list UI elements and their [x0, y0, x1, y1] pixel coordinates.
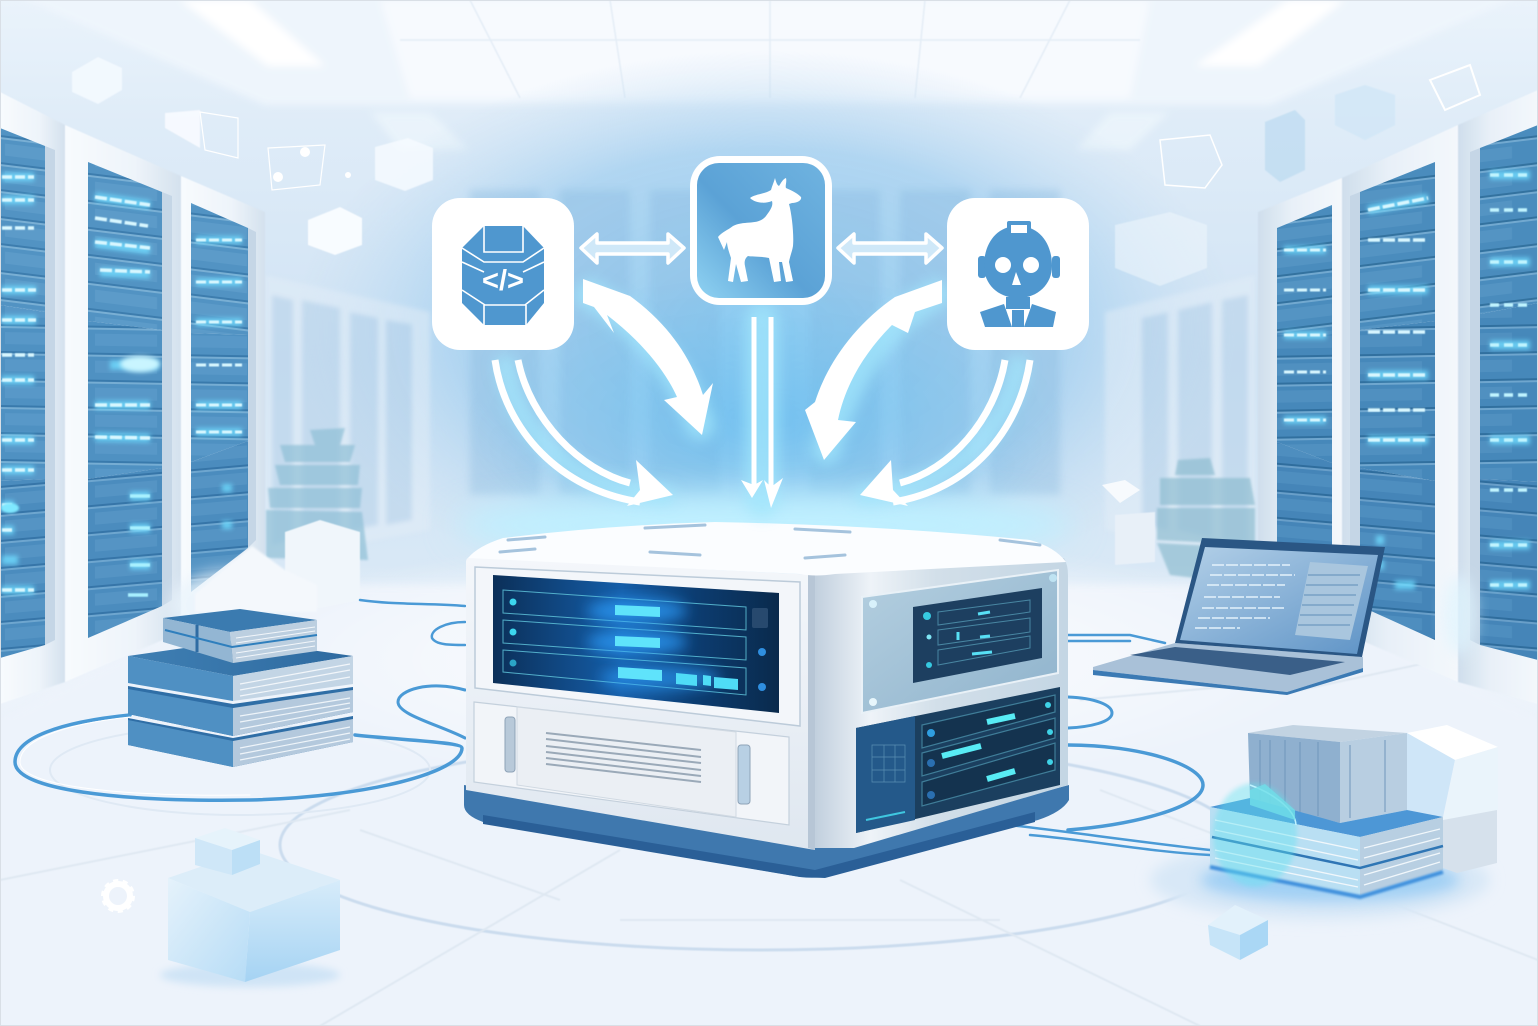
arrow: robot tile to server, wide two-way [805, 280, 942, 460]
stacked storage slabs left [128, 609, 353, 767]
middle slab [128, 686, 353, 736]
teal glow [1213, 783, 1297, 887]
top surface [468, 522, 1066, 576]
floor [0, 530, 1538, 1026]
left background stack and white blocks [195, 428, 368, 612]
silver cube [1248, 725, 1407, 823]
icon tile: llama [690, 156, 832, 305]
icon tile: code database [432, 198, 574, 350]
side upper panel [862, 570, 1058, 713]
blue underglow [1200, 858, 1460, 902]
front display frame [475, 567, 800, 726]
white cube back [1407, 725, 1498, 873]
arrow: llama to robot [838, 234, 942, 263]
network cables [15, 600, 1210, 855]
floating cubes and holograms [72, 57, 1480, 286]
bottom slab [128, 716, 353, 767]
front display [493, 575, 779, 713]
arrow: code tile to server, double line [495, 360, 673, 506]
upper slab [128, 640, 353, 701]
left server racks [0, 92, 290, 704]
base [464, 785, 1069, 878]
glow behind arrows [505, 295, 1018, 500]
small cube bottom right [1208, 905, 1268, 960]
side lower panel [856, 687, 1060, 833]
code glyph: </> [482, 265, 524, 297]
stacked storage right [1200, 725, 1498, 902]
main server [455, 493, 1075, 878]
front body [466, 557, 815, 850]
lower front panel [474, 702, 789, 825]
rack glows [2, 177, 242, 590]
arrow: llama tile to server, double line [741, 317, 783, 508]
arrow: code tile to server, wide two-way [583, 279, 713, 435]
handles [505, 717, 515, 772]
laptop [1093, 538, 1385, 695]
top books [163, 609, 317, 663]
icon: gear [103, 881, 133, 911]
icon tile: robot head [947, 198, 1089, 350]
right server racks [1258, 90, 1538, 704]
vent grille [546, 733, 701, 782]
right background stack and white blocks [1102, 458, 1255, 585]
cube cluster bottom left [160, 828, 340, 987]
arrow: robot tile to server, double line [860, 360, 1030, 506]
arrow: code to llama [581, 234, 684, 263]
side body [805, 558, 1068, 848]
background server rows and central haze [265, 50, 1255, 610]
book base [1210, 798, 1443, 897]
top glow [455, 493, 1075, 557]
